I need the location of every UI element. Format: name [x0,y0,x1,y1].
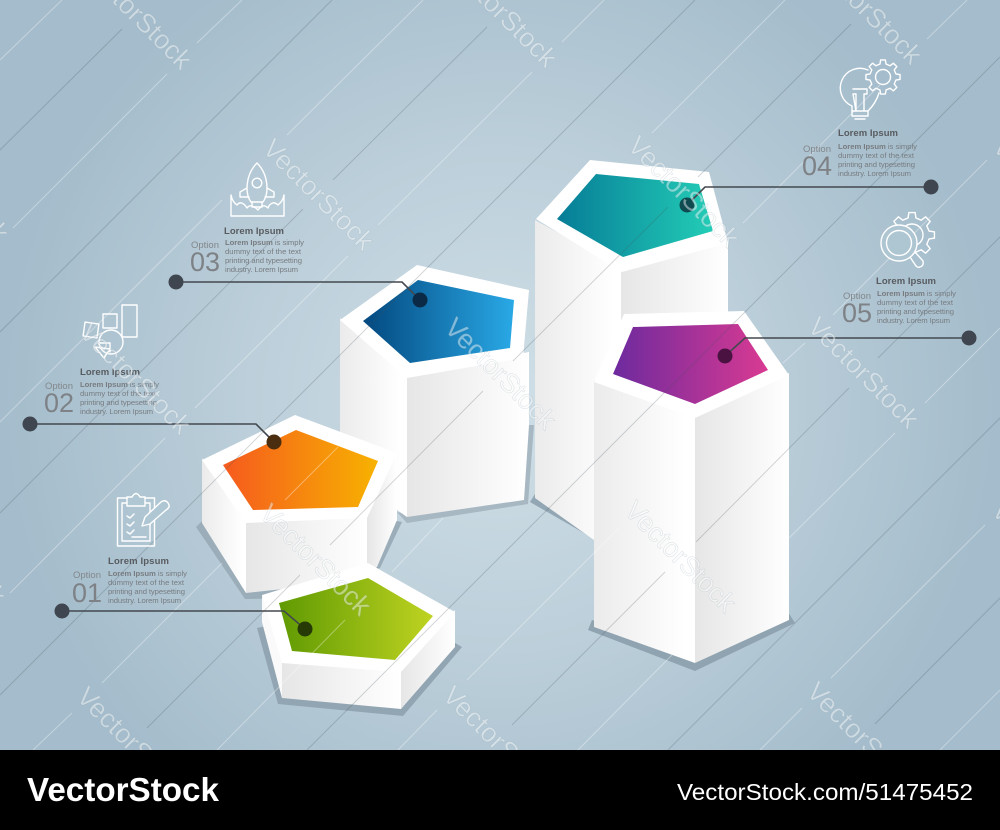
text: option 03: Lorem Ipsum [224,226,284,237]
text: option 05 [842,276,956,328]
text: option 03: industry. Lorem Ipsum [225,265,298,274]
text: option 02: Lorem Ipsum is simply [80,380,159,389]
icon: bulb and gear [840,60,900,119]
watermarks: VectorStock [71,681,194,805]
blue column right face [407,352,529,517]
green block [257,563,462,716]
text: option 01 [72,556,187,608]
text: option 03: dummy text of the text [225,247,302,256]
connector 03 [168,274,428,308]
text: option 04: printing and typesetting [838,160,915,169]
text: option 01: 01 [72,578,102,608]
green block top [262,563,455,672]
watermarks: VectorStock [439,312,562,436]
text: option 03: Lorem Ipsum is simply [225,238,304,247]
text: option 01: dummy text of the text [108,578,185,587]
text: option 04: Lorem Ipsum [838,128,898,139]
text: option 01: industry. Lorem Ipsum [108,596,181,605]
purple column right face [695,373,789,663]
watermarks: VectorStock [801,676,924,800]
text: option 02: Lorem Ipsum [80,367,140,378]
watermarks: VectorStock [622,130,745,254]
text: option 01: Lorem Ipsum [108,556,169,567]
text: option 05: printing and typesetting [877,307,954,316]
text: option 05: Option [843,291,871,302]
connector 02 [22,416,282,450]
orange column [196,415,402,599]
text: option 04: dummy text of the text [838,151,915,160]
teal pentagon [557,174,713,257]
text: option 05: dummy text of the text [877,298,954,307]
teal column [530,160,728,560]
text: option 04: Lorem Ipsum is simply [838,142,917,151]
green pentagon [279,578,433,660]
watermarks: VectorStock [619,495,742,619]
teal column top [536,160,728,272]
footer brand: VectorStock [27,771,220,808]
text: option 02: 02 [44,388,74,418]
connector 04 [680,180,938,212]
teal column right face [621,242,728,420]
text: option 03: printing and typesetting [225,256,302,265]
text: option 03 [190,226,304,277]
watermarks: VectorStock [254,498,377,622]
teal column left face [535,220,622,560]
teal column shadow [530,494,596,540]
icon: clipboard [118,494,169,546]
purple pentagon [613,324,768,404]
text: option 01: Option [73,570,101,581]
blue column left face [340,318,407,517]
watermarks: VectorStock [802,311,925,435]
text: option 05: 05 [842,298,872,328]
purple column shadow [588,612,795,671]
footer bar [0,750,1000,830]
watermarks: VectorStock [437,680,560,804]
blue column shadow [397,425,534,523]
text: option 02: printing and typesetting [80,398,157,407]
text: option 04: industry. Lorem Ipsum [838,169,911,178]
text: option 05: industry. Lorem Ipsum [877,316,950,325]
connector 05 [718,330,976,364]
blue column top [340,265,529,378]
text: option 02: dummy text of the text [80,389,157,398]
watermarks: VectorStock [74,317,197,441]
orange column shadow [196,520,402,599]
text: option 05: Lorem Ipsum [876,276,936,287]
footer url: VectorStock.com/51475452 [677,779,973,805]
icon: charts [83,305,137,358]
text: option 02: industry. Lorem Ipsum [80,407,153,416]
blue pentagon [363,280,514,363]
text: option 02: Option [45,381,73,392]
purple column [588,311,795,671]
text: option 05: Lorem Ipsum is simply [877,289,956,298]
orange column front face [246,514,367,593]
purple column left face [594,380,695,663]
text: option 04: 04 [802,151,832,181]
orange column right face [367,450,397,572]
text: option 04 [802,128,917,181]
orange pentagon [223,430,378,510]
purple column top [594,311,789,418]
green block right face [401,610,455,709]
text: option 03: 03 [190,247,220,277]
text: option 02 [44,367,159,418]
icon: magnifier and gear [881,213,934,267]
green block front face [282,660,401,709]
connector 01 [54,604,312,636]
green block left edge [262,595,284,698]
text: option 01: Lorem Ipsum is simply [108,569,187,578]
orange column left face [202,458,247,593]
text: option 01: printing and typesetting [108,587,185,596]
green block shadow [257,626,462,716]
text: option 04: Option [803,144,831,155]
blue column [340,265,534,523]
watermarks: VectorStock [257,133,380,257]
icon: rocket [231,163,284,216]
orange column top [202,415,397,523]
text: option 03: Option [191,240,219,251]
